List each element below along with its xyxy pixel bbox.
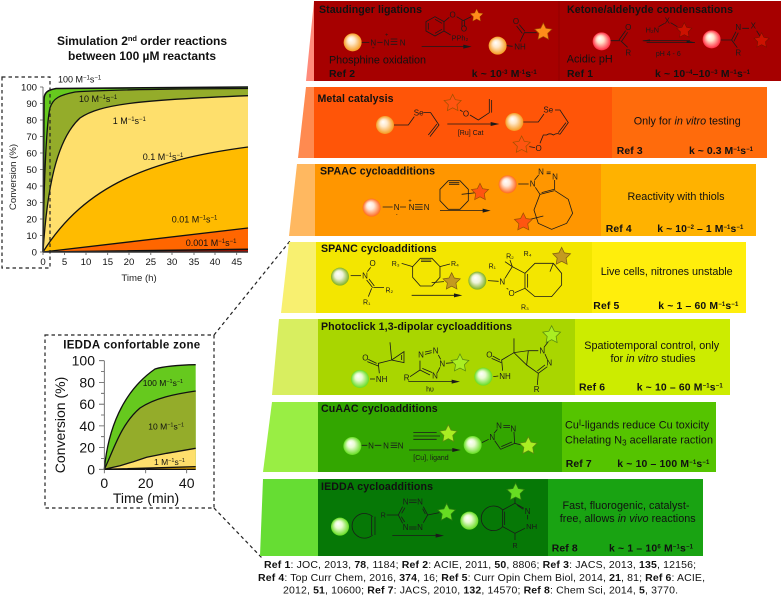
inset curve labels: −1: [179, 458, 185, 464]
inset x tick labels: 40: [179, 475, 195, 491]
x axis tick labels: [40, 257, 242, 268]
x axis tick labels: 5: [62, 257, 67, 268]
rate: Staudinger: -3: [502, 70, 508, 76]
inset curve labels: −1: [168, 458, 174, 464]
scheme: ketone/aldehyde condensation: X: [665, 17, 671, 26]
curve labels: −1: [83, 76, 91, 82]
rate: Staudinger: -1: [520, 70, 526, 76]
text: Phosphine oxidation: Phosphine oxidation: [329, 54, 426, 66]
scheme: [351, 326, 561, 394]
curve labels: −1: [230, 239, 237, 245]
rate: s: [680, 544, 686, 554]
curve labels: s: [225, 238, 230, 248]
scheme: +: [408, 199, 412, 205]
panel: SPANC cycloadditions: [281, 242, 746, 313]
inset y tick labels: 100: [72, 353, 95, 369]
panel: SPAAC cycloadditions: [289, 164, 756, 236]
strip: [272, 319, 318, 395]
scheme: ketone/aldehyde condensation: X: [751, 22, 757, 31]
text: Acidic pH: Acidic pH: [567, 54, 613, 66]
notes area: [612, 87, 767, 158]
rate: −1: [736, 225, 744, 231]
y axis tick labels: 30: [26, 198, 37, 209]
heading: Metal catalysis: [318, 93, 394, 105]
reaction area: [318, 319, 575, 395]
inset axes: [99, 361, 187, 473]
scheme: R₄: [451, 261, 459, 268]
area: 0.01 M-1s-1 band: [43, 228, 248, 252]
heading: simulation chart title: between 100 µM reactants: [68, 49, 216, 63]
scheme: ketone/aldehyde condensation: R: [625, 48, 631, 57]
rate: s: [725, 301, 731, 312]
rate: −1: [673, 544, 680, 550]
heading: SPAAC cycloadditions: [320, 166, 435, 178]
scheme: N: [417, 497, 423, 506]
curve labels: 10 M: [79, 94, 99, 104]
strip: [298, 87, 314, 158]
rate: ketone/aldehyde: −1: [743, 70, 751, 76]
strip: [263, 402, 318, 472]
x axis title: Time (h): [121, 273, 157, 284]
rate: 6: [657, 544, 661, 550]
inset curve labels: −1: [177, 379, 183, 385]
scheme: Staudinger: [344, 9, 552, 55]
curve labels: 0.001 M: [186, 238, 218, 248]
scheme: Staudinger: N: [400, 38, 406, 47]
x axis tick labels: 10: [81, 257, 91, 268]
rate: s: [740, 146, 746, 157]
notes area: [562, 402, 716, 472]
scheme: ketone/aldehyde condensation: N: [735, 23, 741, 32]
note: chelating: Chelating N: [565, 434, 622, 446]
area: 10 M-1s-1 band: [43, 88, 248, 252]
notes area: [601, 164, 756, 236]
rate: k ~ 0.3 M: [689, 146, 733, 157]
notes area: [575, 319, 730, 395]
inset y tick labels: 60: [79, 396, 95, 412]
panel background: [314, 1, 781, 81]
strip: [306, 1, 314, 81]
inset curve labels: 10 M: [148, 422, 167, 432]
x axis tick labels: 40: [210, 257, 220, 268]
rate: Staudinger: -1: [531, 70, 537, 76]
scheme: Staudinger: O: [450, 10, 456, 19]
curve labels: −1: [139, 117, 147, 123]
scheme: -: [396, 211, 398, 217]
strip: [260, 479, 318, 556]
rate: −1: [746, 147, 754, 153]
curve labels: −1: [99, 95, 107, 101]
x axis tick labels: 15: [102, 257, 113, 268]
curve labels: −1: [94, 76, 102, 82]
curve labels: 100 M: [58, 74, 83, 84]
y axis tick labels: 20: [26, 214, 37, 226]
scheme: Staudinger: +: [385, 33, 389, 39]
scheme: ketone/aldehyde condensation: pH 4 - 6: [656, 51, 681, 58]
scheme: R₃: [392, 261, 400, 268]
inset frame: [45, 335, 214, 508]
inset x tick labels: 0: [100, 475, 108, 491]
rate: M: [661, 544, 673, 554]
curve labels: 0.1 M: [143, 152, 165, 162]
scheme: N: [489, 433, 495, 442]
x axis tick labels: 20: [124, 257, 134, 268]
scheme: Staudinger: NH: [514, 42, 526, 51]
note: Fast, fluorogenic, catalyst-: [562, 500, 690, 512]
note: [560, 500, 696, 525]
rate: −1: [686, 544, 694, 550]
scheme: N: [496, 421, 502, 430]
rate: Staudinger: M: [508, 69, 519, 80]
scheme: R: [512, 543, 517, 550]
scheme: ketone/aldehyde condensation: R: [735, 48, 741, 57]
scheme: R₁: [363, 299, 371, 306]
x axis tick labels: 45: [231, 257, 242, 268]
scheme: N: [409, 203, 415, 212]
rate: −1: [702, 460, 710, 466]
note: Only for in vitro testing: [634, 116, 741, 128]
notes area: [548, 479, 703, 556]
inset panel: IEDDA confortable zone: [45, 335, 214, 508]
notes area: [592, 242, 746, 313]
note: ligands: I: [579, 418, 581, 428]
heading: IEDDA cycloadditions: [321, 481, 433, 493]
scheme: ketone/aldehyde condensation: [593, 17, 769, 58]
inset curve labels: s: [173, 378, 177, 388]
scheme: [331, 483, 537, 550]
heading: simulation chart title: nd: [128, 34, 137, 43]
inset y tick labels: 20: [79, 440, 95, 456]
inset title: IEDDA confortable zone: [63, 340, 200, 352]
scheme: O: [362, 354, 368, 363]
inset area: 100 M-1s-1: [104, 365, 196, 469]
note: ligands: Cu: [565, 420, 579, 432]
scheme: Se: [414, 108, 424, 117]
y axis tick labels: 70: [26, 132, 37, 143]
rate: −1: [723, 225, 731, 231]
rate: ketone/aldehyde: −1: [730, 70, 737, 76]
scheme: N: [417, 523, 423, 532]
scheme: [Ru] Cat: [458, 130, 484, 137]
note: chelating: 3: [622, 438, 627, 448]
rate: −1: [703, 384, 710, 390]
rate: −1: [733, 147, 741, 153]
y axis tick labels: 100: [21, 82, 37, 94]
panel: Staudinger and ketone/aldehyde: [306, 1, 781, 81]
note: Live cells, nitrones unstable: [601, 266, 733, 278]
scheme: O: [370, 259, 376, 268]
panel: Photoclick 1,3-dipolar cycloadditions: [272, 319, 730, 395]
strip: [281, 242, 316, 313]
reference: Ref 7: [566, 459, 592, 470]
scheme: Staudinger: N: [384, 38, 390, 47]
y axis tick labels: 90: [26, 99, 37, 110]
note: Spatiotemporal control, only: [584, 340, 720, 352]
scheme: N: [525, 507, 531, 516]
inset area: 0.1 M-1s-1: [104, 467, 196, 469]
inset curve labels: s: [173, 422, 178, 432]
y axis title: Conversion (%): [8, 144, 19, 210]
scheme: N: [362, 272, 368, 281]
reaction area: [315, 164, 601, 236]
scheme: R₄: [524, 251, 532, 258]
inset y tick labels: [72, 353, 95, 477]
scheme: NH: [526, 522, 537, 531]
reaction area: [318, 479, 548, 556]
scheme: [343, 421, 537, 462]
rate: Staudinger: k ~ 10: [472, 69, 502, 80]
inset y tick labels: 40: [79, 418, 95, 434]
curves: [43, 87, 248, 252]
note: Reactivity with thiols: [628, 191, 725, 203]
axes and ticks: [40, 87, 248, 255]
rate: s: [730, 224, 736, 235]
area: 100 M-1s-1 band: [43, 87, 248, 252]
curve labels: s: [172, 152, 177, 162]
rate: ketone/aldehyde: k ~ 10: [655, 69, 685, 80]
rate: −1: [718, 302, 726, 308]
scheme: N: [398, 441, 404, 450]
rate: −1: [731, 302, 739, 308]
scheme: NH: [499, 372, 511, 381]
reaction area: [314, 87, 612, 158]
heading: simulation chart title: [57, 34, 227, 63]
rate: ketone/aldehyde: s: [737, 69, 743, 80]
curve labels: −1: [177, 153, 184, 159]
scheme: [331, 247, 571, 312]
y axis tick labels: 40: [26, 182, 37, 192]
scheme: R₂: [385, 288, 393, 295]
inset curve labels: s: [174, 457, 179, 467]
inset curve labels: −1: [167, 422, 173, 428]
curve labels: s: [90, 74, 95, 84]
heading: simulation chart title: Simulation 2: [57, 34, 128, 48]
inset y tick labels: 0: [87, 461, 95, 477]
dashed connectors: zoom lines to inset: [214, 241, 290, 558]
scheme: ketone/aldehyde condensation: O: [625, 23, 631, 32]
curve labels: −1: [165, 153, 173, 159]
reaction area: [316, 242, 592, 313]
reaction area: [318, 402, 562, 472]
heading: SPANC cycloadditions: [321, 243, 437, 255]
scheme: R: [404, 374, 410, 383]
scheme: ketone/aldehyde condensation: H₂N: [646, 25, 659, 34]
rate: −1: [716, 384, 723, 390]
rate: k ~ 10 – 100 M: [617, 459, 689, 470]
inset curve labels: 100 M: [143, 378, 166, 388]
scheme: Staudinger: O: [513, 17, 519, 26]
scheme: [Cu], ligand: [413, 455, 449, 462]
inset y axis title: Conversion (%): [52, 377, 68, 473]
scheme: N: [439, 360, 445, 369]
scheme: R₁: [489, 264, 497, 271]
scheme: O: [486, 351, 492, 360]
panel: CuAAC cycloadditions: [263, 402, 716, 472]
rate: k ~ 1 – 60 M: [658, 301, 718, 312]
note: ligands: -ligands reduce Cu toxicity: [581, 420, 710, 432]
scheme: N: [552, 172, 558, 181]
y axis tick labels: [21, 82, 37, 258]
scheme: NH: [376, 375, 388, 384]
chart: simulation of second order reactions: [8, 74, 248, 284]
scheme: N: [546, 359, 552, 368]
x axis tick labels: 30: [167, 257, 177, 268]
scheme: O: [463, 110, 469, 119]
rate: k ~ 1 – 10: [609, 544, 657, 554]
rate: −2: [687, 225, 695, 231]
scheme: R₃: [521, 305, 529, 312]
scheme: hυ: [426, 386, 434, 393]
scheme: [363, 167, 573, 230]
panel: Metal catalysis: [298, 87, 767, 158]
scheme: N: [424, 203, 430, 212]
scheme: Staudinger: N: [370, 38, 376, 47]
inset y tick labels: 80: [79, 374, 95, 390]
scheme: Se: [543, 106, 554, 115]
reference: Ref 2: Ref 2: [329, 69, 355, 80]
inset curve labels: −1: [178, 422, 184, 428]
scheme: R: [381, 512, 386, 519]
inset x tick labels: [100, 475, 195, 491]
scheme: N: [368, 441, 374, 450]
references text: [258, 559, 705, 596]
inset curve labels: −1: [166, 379, 173, 385]
scheme: N: [539, 346, 545, 355]
x axis tick labels: 35: [189, 257, 199, 268]
y axis tick labels: 10: [26, 231, 37, 242]
reference: Ref 4: [606, 224, 632, 235]
references text: Ref 1: JOC, 2013, 78, 1184; Ref 2: ACIE, 2011, 50, 8806; Ref 3: JACS, 2013, 135, 12156;: [264, 559, 696, 571]
heading: Staudinger ligations: Staudinger ligations: [319, 4, 422, 16]
inset curve labels: [143, 378, 185, 467]
scheme: O: [509, 289, 515, 298]
rate: – 1 M: [694, 224, 723, 235]
note: free, allows in vivo reactions: [560, 513, 696, 525]
note: for in vitro studies: [610, 353, 696, 365]
area: 1 M-1s-1 band: [43, 96, 248, 252]
scheme: N: [403, 497, 409, 506]
scheme: N: [499, 277, 505, 286]
area: 0.001 M-1s-1 band: [43, 249, 248, 252]
reference: Ref 5: [593, 301, 620, 312]
scheme: N: [538, 167, 544, 176]
reference: Ref 3: [617, 146, 643, 157]
scheme: R₂: [506, 254, 514, 261]
curve labels: s: [106, 94, 111, 104]
curve labels: s: [135, 116, 140, 126]
heading: simulation chart title: order reactions: [137, 34, 227, 48]
scheme: N: [394, 203, 400, 212]
heading: CuAAC cycloadditions: [321, 403, 438, 415]
rate: ketone/aldehyde: –10: [693, 69, 711, 80]
inset x axis title: Time (min): [113, 490, 179, 506]
rate: −1: [689, 460, 697, 466]
curve labels: s: [206, 215, 211, 225]
scheme: N: [432, 372, 438, 381]
curve labels: −1: [211, 216, 218, 222]
scheme: N: [530, 180, 536, 189]
scheme: N: [383, 441, 389, 450]
note: [584, 340, 720, 365]
rate: ketone/aldehyde: −3: [711, 70, 718, 76]
x axis tick labels: 0: [40, 257, 46, 268]
scheme: N: [433, 346, 439, 355]
reference: Ref 6: [579, 382, 605, 394]
rate: Staudinger: s: [525, 69, 531, 80]
inset area: 10 M-1s-1: [104, 391, 196, 469]
curve labels: −1: [218, 239, 226, 245]
rate: ketone/aldehyde: −4: [685, 70, 693, 76]
scheme: N: [510, 425, 516, 434]
scheme: N: [418, 351, 424, 360]
inset curve labels: 1 M: [154, 457, 168, 467]
strip: [289, 164, 315, 236]
y axis tick labels: 80: [26, 116, 37, 126]
inset curves: [104, 365, 196, 469]
scheme: Staudinger: O: [461, 25, 467, 34]
heading: Photoclick 1,3-dipolar cycloadditions: [321, 321, 512, 333]
rate: k ~ 10: [657, 224, 687, 235]
references text: 2012, 51, 10600; Ref 7: JACS, 2010, 132, 14570; Ref 8: Chem Sci, 2014, 5, 3770.: [283, 584, 678, 596]
rate: s: [696, 459, 702, 470]
y axis tick labels: 0: [32, 248, 37, 258]
curve labels: −1: [110, 95, 118, 101]
rate: k ~ 10 – 60 M: [637, 382, 702, 394]
dashed box: early time window on main chart: [2, 77, 50, 268]
references text: Ref 4: Top Curr Chem, 2016, 374, 16; Ref 5: Curr Opin Chem Biol, 2014, 21, 81; Ref 6: ACIE,: [258, 572, 705, 584]
scheme: Staudinger: -: [372, 43, 375, 52]
panel: IEDDA cycloadditions: [260, 479, 703, 556]
rate: ketone/aldehyde: M: [718, 69, 730, 80]
inset x tick labels: 20: [138, 475, 154, 491]
x axis tick labels: 25: [145, 257, 156, 268]
reference: Ref 8: [552, 544, 578, 554]
area: 0.1 M-1s-1 band: [43, 147, 248, 252]
curve labels: [58, 74, 237, 248]
curve labels: −1: [199, 216, 207, 222]
reference: Ref 1: Ref 1: [567, 69, 593, 80]
curve labels: 1 M: [113, 116, 128, 126]
scheme: [376, 94, 568, 153]
curve labels: −1: [128, 117, 135, 123]
scheme: N: [403, 523, 409, 532]
note: chelating: acellarate raction: [627, 434, 713, 446]
scheme: O: [536, 144, 542, 153]
heading: Ketone/aldehyde condensations: Ketone/aldehyde condensations: [567, 4, 733, 16]
scheme: R: [534, 385, 540, 394]
curve labels: 0.01 M: [172, 215, 199, 225]
y axis tick labels: 60: [26, 148, 37, 160]
y axis tick labels: 50: [26, 165, 37, 176]
inset area: 1 M-1s-1: [104, 448, 196, 469]
rate: s: [710, 382, 716, 394]
scheme: Staudinger: PPh₂: [452, 34, 468, 43]
